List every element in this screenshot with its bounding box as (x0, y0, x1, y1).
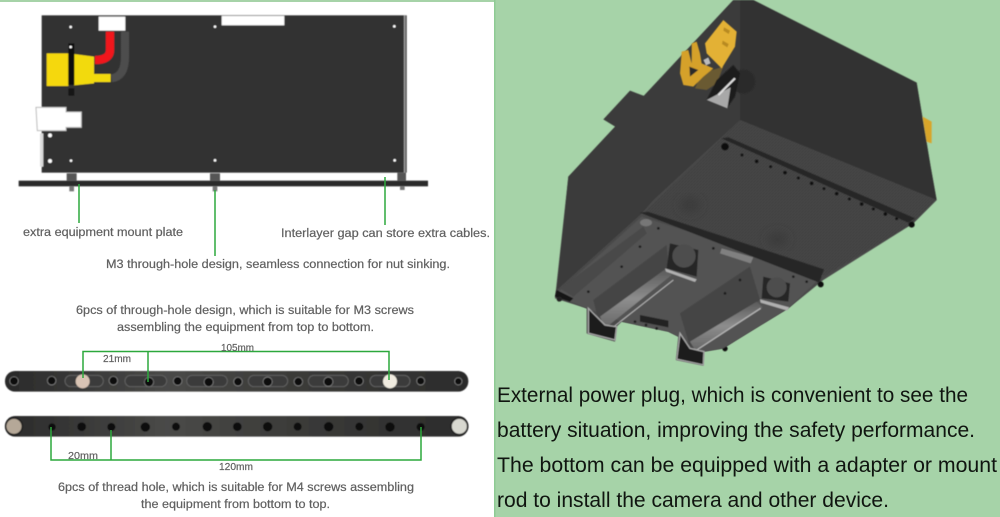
text: M3 through-hole description (76, 305, 414, 334)
M4 threaded bar (5, 416, 468, 437)
left face (557, 0, 740, 290)
mounting tab (603, 91, 655, 132)
motor disc (731, 70, 755, 94)
left foot (588, 308, 617, 340)
M3 slotted bar (5, 371, 468, 392)
dimension lines: M4 bar (51, 427, 421, 460)
black frame (707, 65, 740, 108)
right flange (760, 299, 789, 311)
text: M4 thread hole description: the equipment from bottom to top. (141, 499, 330, 511)
text: M4 thread hole description (58, 482, 414, 511)
right foot (677, 333, 704, 365)
silver bracket (707, 87, 731, 108)
left rail (600, 269, 672, 328)
plate screw holes (587, 227, 808, 330)
label: 120mm: 120mm (219, 461, 253, 473)
yellow XT plug (705, 20, 737, 68)
side yellow connector (923, 117, 932, 143)
callout lines (79, 177, 385, 256)
right gear pocket (762, 277, 790, 302)
centre gap bar (640, 315, 668, 327)
text: product description: rod to install the camera and other device. (497, 489, 889, 512)
silhouette (555, 0, 937, 366)
front face (643, 120, 937, 277)
panel: mount plate details (0, 2, 494, 517)
corner bar end (555, 290, 573, 302)
label: extra equipment mount plate: extra equipment mount plate (23, 227, 183, 239)
battery box top view (19, 15, 428, 191)
bar holes (721, 143, 915, 351)
text: product description: The bottom can be equipped with a adapter or mount (497, 454, 997, 477)
text: product description (497, 384, 997, 512)
rear mounting bar (640, 212, 824, 283)
label: interlayer gap: Interlayer gap can store extra cables. (281, 228, 490, 240)
front face shadows (680, 198, 787, 246)
divider (494, 0, 496, 517)
front mounting bar (722, 137, 915, 223)
left flange (665, 268, 697, 282)
text: product description: External power plug, which is convenient to see the (497, 384, 968, 407)
top right face (738, 0, 937, 200)
label: 20mm: 20mm (68, 450, 98, 462)
text: product description: battery situation, improving the safety performance. (497, 419, 975, 442)
small plate (720, 248, 753, 263)
text: M4 thread hole description: 6pcs of thread hole, which is suitable for M4 screws assembling (58, 482, 414, 494)
text: M3 through-hole description: 6pcs of through-hole design, which is suitable for M3 screws (76, 305, 414, 317)
yellow connector clip (680, 42, 713, 87)
left edge rail (560, 227, 647, 297)
brown connector block (695, 67, 723, 90)
left bracket panel (593, 245, 668, 320)
label: 105mm: 105mm (221, 342, 254, 354)
bottom plate (555, 217, 823, 352)
label: 21mm: 21mm (103, 353, 131, 365)
label: M3 through-hole: M3 through-hole design, seamless connection for nut sinking. (106, 259, 450, 271)
illustration: battery box underside view (555, 0, 937, 366)
left gear pocket (667, 243, 698, 277)
text: M3 through-hole description: assembling the equipment from top to bottom. (117, 322, 374, 334)
right bracket panel (680, 267, 760, 347)
dimension lines: M3 bar (83, 352, 389, 382)
right rail (690, 302, 763, 350)
